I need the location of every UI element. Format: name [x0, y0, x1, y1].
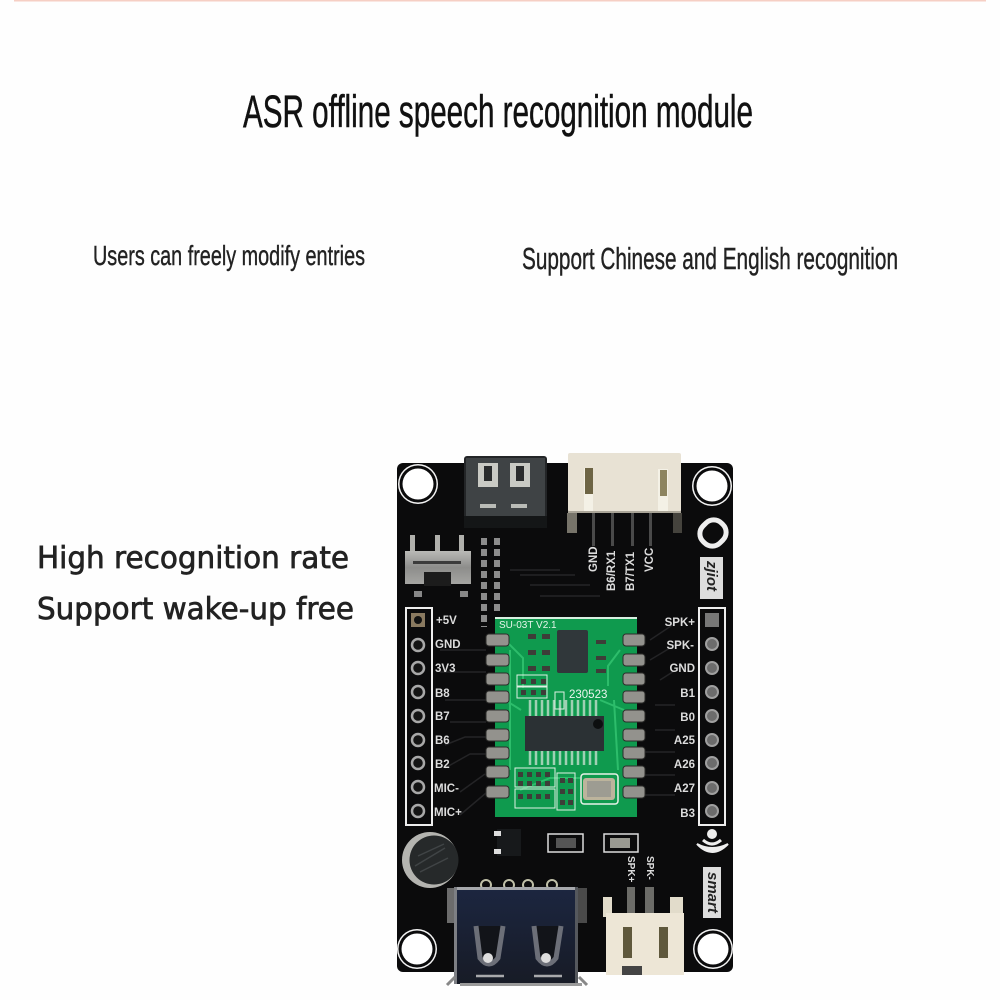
board traces	[440, 570, 682, 815]
connector pin labels: VCC	[644, 548, 656, 572]
green voice module	[486, 617, 645, 817]
small SMD parts: SPK+	[625, 856, 636, 883]
left pin labels: B6	[435, 735, 450, 747]
mounting holes	[397, 464, 733, 969]
connector pin labels: B7/TX1	[625, 551, 637, 591]
left pin labels: B8	[435, 688, 450, 700]
USB-A connector	[447, 880, 587, 986]
green voice module: SU-03T V2.1	[499, 620, 557, 631]
zjiot logo	[695, 515, 731, 599]
crystal	[581, 774, 618, 804]
right pin labels: SPK-	[667, 640, 694, 652]
left pin labels: B2	[435, 759, 450, 771]
feature text: recognition rate: High recognition rate	[37, 541, 349, 576]
right pin labels: A25	[674, 735, 696, 747]
small SMD parts	[494, 829, 655, 883]
title: ASR offline speech recognition module	[243, 86, 753, 137]
right pin labels: B3	[680, 808, 695, 820]
smart label: smart	[704, 872, 721, 914]
left pin labels: B7	[435, 711, 450, 723]
right pin labels: B1	[680, 688, 696, 700]
microphone	[402, 832, 458, 888]
right pin labels	[665, 617, 696, 820]
left solder castellations	[486, 634, 509, 798]
right pin labels: GND	[669, 663, 695, 675]
date code: 230523	[569, 689, 607, 701]
circuit board	[397, 453, 733, 986]
right pin header	[699, 608, 725, 825]
USB-C connector	[464, 456, 547, 528]
connector pin labels	[588, 546, 656, 591]
main processor chip	[525, 700, 604, 765]
connector pin labels: GND	[588, 546, 600, 572]
left pin labels: GND	[435, 639, 461, 651]
right pin labels: B0	[680, 712, 695, 724]
right pin labels: A26	[674, 759, 695, 771]
left pin labels: MIC+	[434, 807, 462, 819]
small components	[518, 634, 606, 805]
JST connector top	[567, 453, 682, 546]
right pin labels: SPK+	[665, 617, 695, 629]
right solder castellations	[623, 634, 645, 798]
feature text: modify entries: Users can freely modify entries	[93, 240, 365, 271]
zjiot logo: zjiot	[703, 560, 720, 592]
switch silkscreen marks	[484, 538, 497, 627]
left pin labels	[434, 615, 462, 819]
right pin labels: A27	[674, 783, 695, 795]
left pin header	[406, 608, 432, 825]
flash chip	[557, 630, 588, 673]
small component outlines	[515, 675, 575, 810]
feature text: wake-up free: Support wake-up free	[37, 592, 354, 627]
wireless icon	[697, 829, 728, 852]
left pin labels: 3V3	[435, 663, 455, 675]
board base	[397, 463, 733, 972]
connector pin labels: B6/RX1	[606, 550, 618, 591]
slide switch	[405, 535, 471, 597]
small SMD parts: SPK-	[644, 856, 655, 880]
left pin labels: MIC-	[434, 783, 459, 795]
left pin labels: +5V	[436, 615, 457, 627]
JST connector bottom	[603, 887, 684, 975]
